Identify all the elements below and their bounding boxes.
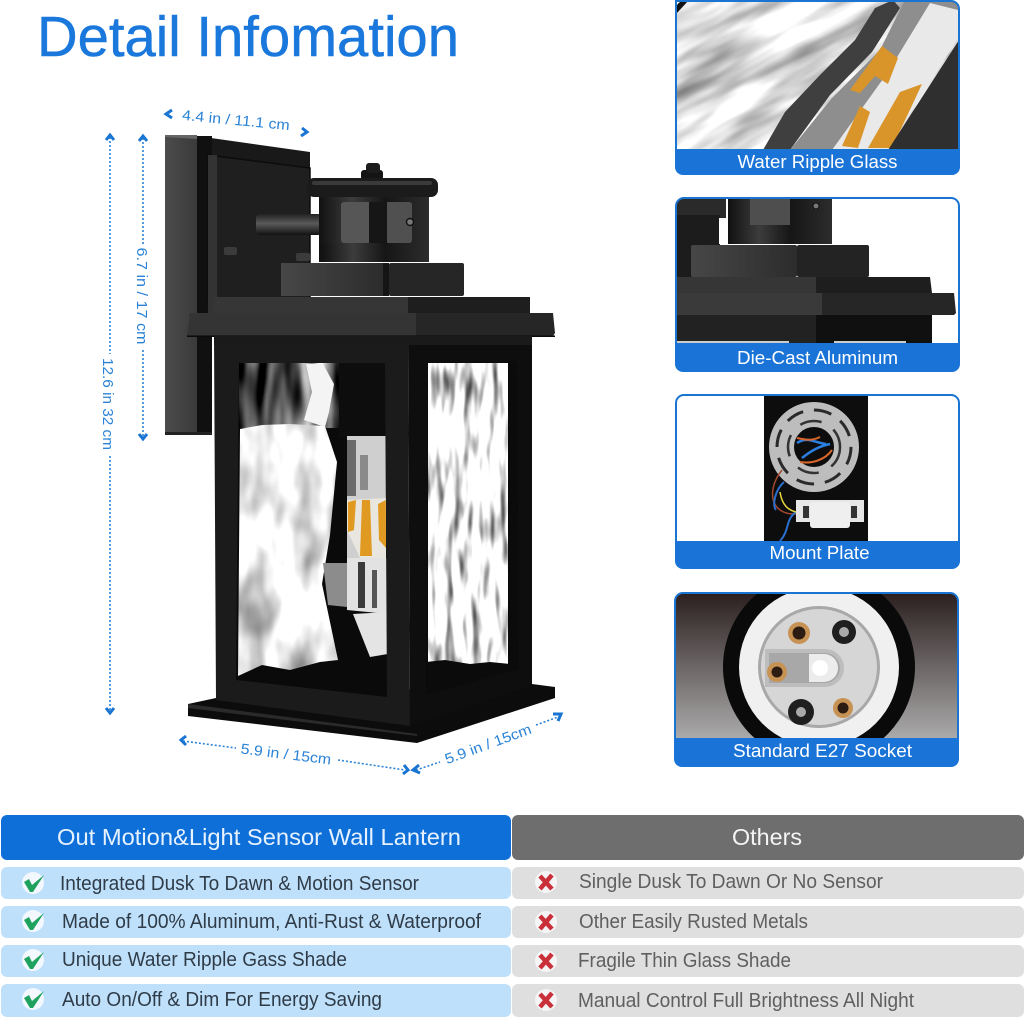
lantern base: [188, 684, 555, 743]
dimension: base width right: 5.9 in / 15cm: [443, 722, 534, 768]
row 4 ours: Auto On/Off & Dim For Energy Saving: [62, 989, 382, 1011]
left glass pane: [234, 360, 390, 700]
caption: Mount Plate: [770, 543, 870, 563]
row 1 others: Single Dusk To Dawn Or No Sensor: [579, 871, 883, 893]
header: our lantern: Out Motion&Light Sensor Wall Lantern: [57, 824, 461, 850]
header: our lantern: [1, 815, 511, 860]
caption: Water Ripple Glass: [738, 152, 898, 172]
row 2 ours: [1, 906, 511, 938]
lantern roof plates: [187, 297, 555, 337]
row 3 others: Fragile Thin Glass Shade: [578, 950, 791, 972]
row 3 ours: [1, 945, 511, 977]
row 1 others: [512, 867, 1024, 899]
dimension: bracket height: [133, 136, 149, 439]
dimension: bracket height: 6.7 in / 17 cm: [133, 248, 149, 344]
row 2 ours: Made of 100% Aluminum, Anti-Rust & Waterproof: [62, 911, 481, 933]
dimension: base width left: 5.9 in / 15cm: [240, 742, 332, 768]
dimension: bracket width: [166, 108, 307, 136]
row 4 ours: [1, 984, 511, 1017]
caption: [675, 343, 960, 372]
row 2 others: Other Easily Rusted Metals: [579, 911, 808, 933]
motion sensor head: [256, 163, 438, 262]
dimension: bracket width: 4.4 in / 11.1 cm: [181, 108, 290, 134]
dimension: base width right: [413, 714, 561, 773]
dimension: total height: 12.6 in 32 cm: [99, 358, 115, 450]
panel: standard e27 socket: [674, 592, 959, 767]
panel: water ripple glass: [675, 0, 960, 175]
lantern product photo: [165, 135, 555, 743]
row 1 ours: Integrated Dusk To Dawn & Motion Sensor: [60, 873, 419, 895]
lantern body frame: [214, 336, 532, 726]
panel: die-cast aluminum: [675, 198, 960, 372]
header: others: [512, 815, 1024, 860]
wall bracket backplate: [165, 135, 310, 435]
title: Detail Infomation: [37, 5, 459, 69]
row 3 ours: Unique Water Ripple Gass Shade: [62, 949, 347, 971]
caption: [675, 150, 960, 175]
caption: Standard E27 Socket: [733, 741, 912, 761]
comparison table: [1, 815, 1024, 1017]
caption: Die-Cast Aluminum: [737, 348, 898, 368]
caption: [674, 738, 959, 767]
dimension: base width left: [181, 736, 408, 774]
panel: mount plate: [675, 395, 960, 569]
caption: [675, 541, 960, 569]
lantern top box: [281, 263, 464, 296]
right glass pane: [428, 363, 508, 664]
row 1 ours: [1, 867, 511, 899]
row 3 others: [512, 945, 1024, 977]
row 2 others: [512, 906, 1024, 938]
row 4 others: [512, 984, 1024, 1017]
row 4 others: Manual Control Full Brightness All Night: [578, 990, 914, 1012]
header: others: Others: [732, 824, 802, 850]
dimension: total height: [99, 135, 115, 713]
